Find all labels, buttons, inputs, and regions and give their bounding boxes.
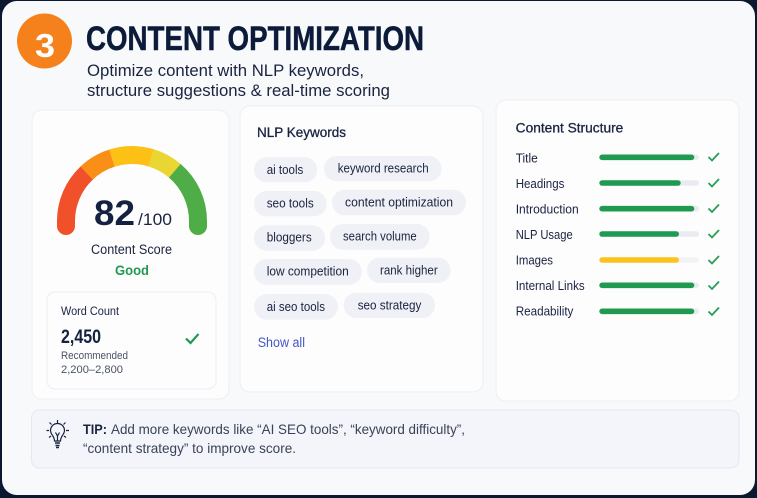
keyword chips: ai seo tools [267,300,325,314]
word count card: 2,450 [61,326,101,348]
row labels: NLP Usage [516,228,573,242]
keyword chips: keyword research [338,162,429,176]
row labels: Introduction [516,203,579,217]
keyword chips: low competition [267,265,349,279]
keyword chips: bloggers [267,231,312,245]
score rating: Good [115,262,149,278]
panel heading: Content Structure [516,121,623,136]
tip text: “content strategy” to improve score. [83,440,296,456]
score value: /100 [138,210,172,229]
icon: number 3 badge: 3 [35,27,55,64]
panel: NLP keywords [240,106,483,392]
header [17,14,424,100]
tip text: TIP: [83,421,107,437]
subtitle: structure suggestions & real-time scoring [87,81,390,100]
score value: 82 [94,194,135,233]
icon: light bulb [46,420,69,448]
tip text [83,421,465,456]
keyword chips: rank higher [380,263,438,277]
keyword chips: seo strategy [358,299,422,313]
word count card: Recommended [61,350,128,362]
keyword chips [254,156,466,320]
panel heading: NLP Keywords [257,124,346,140]
word count card: Word Count [61,306,120,318]
word count card [47,292,216,389]
tip text: Add more keywords like “AI SEO tools”, “keyword difficulty”, [111,421,465,437]
word count card: 2,200–2,800 [61,364,123,376]
gauge chart [66,155,198,226]
icon: check [186,334,198,343]
row labels: Internal Links [516,279,585,293]
icon: number 3 badge [17,14,72,68]
row labels: Readability [516,304,574,318]
panel: content structure [496,100,739,401]
keyword chips: seo tools [267,197,314,211]
progress bars [599,154,699,314]
check marks [708,153,719,315]
keyword chips: search volume [343,229,417,243]
subtitle: Optimize content with NLP keywords, [87,61,364,80]
score label: Content Score [91,242,172,257]
subtitle [87,61,390,100]
row labels [516,152,585,318]
row labels: Title [516,152,538,166]
keyword chips: content optimization [345,196,453,210]
score value [94,194,172,233]
row labels: Headings [516,177,564,191]
row labels: Images [516,254,553,268]
show all link: Show all [258,335,305,350]
tip callout [32,410,739,468]
title: CONTENT OPTIMIZATION [86,20,424,58]
keyword chips: ai tools [267,163,303,177]
panel: content score [32,110,229,399]
